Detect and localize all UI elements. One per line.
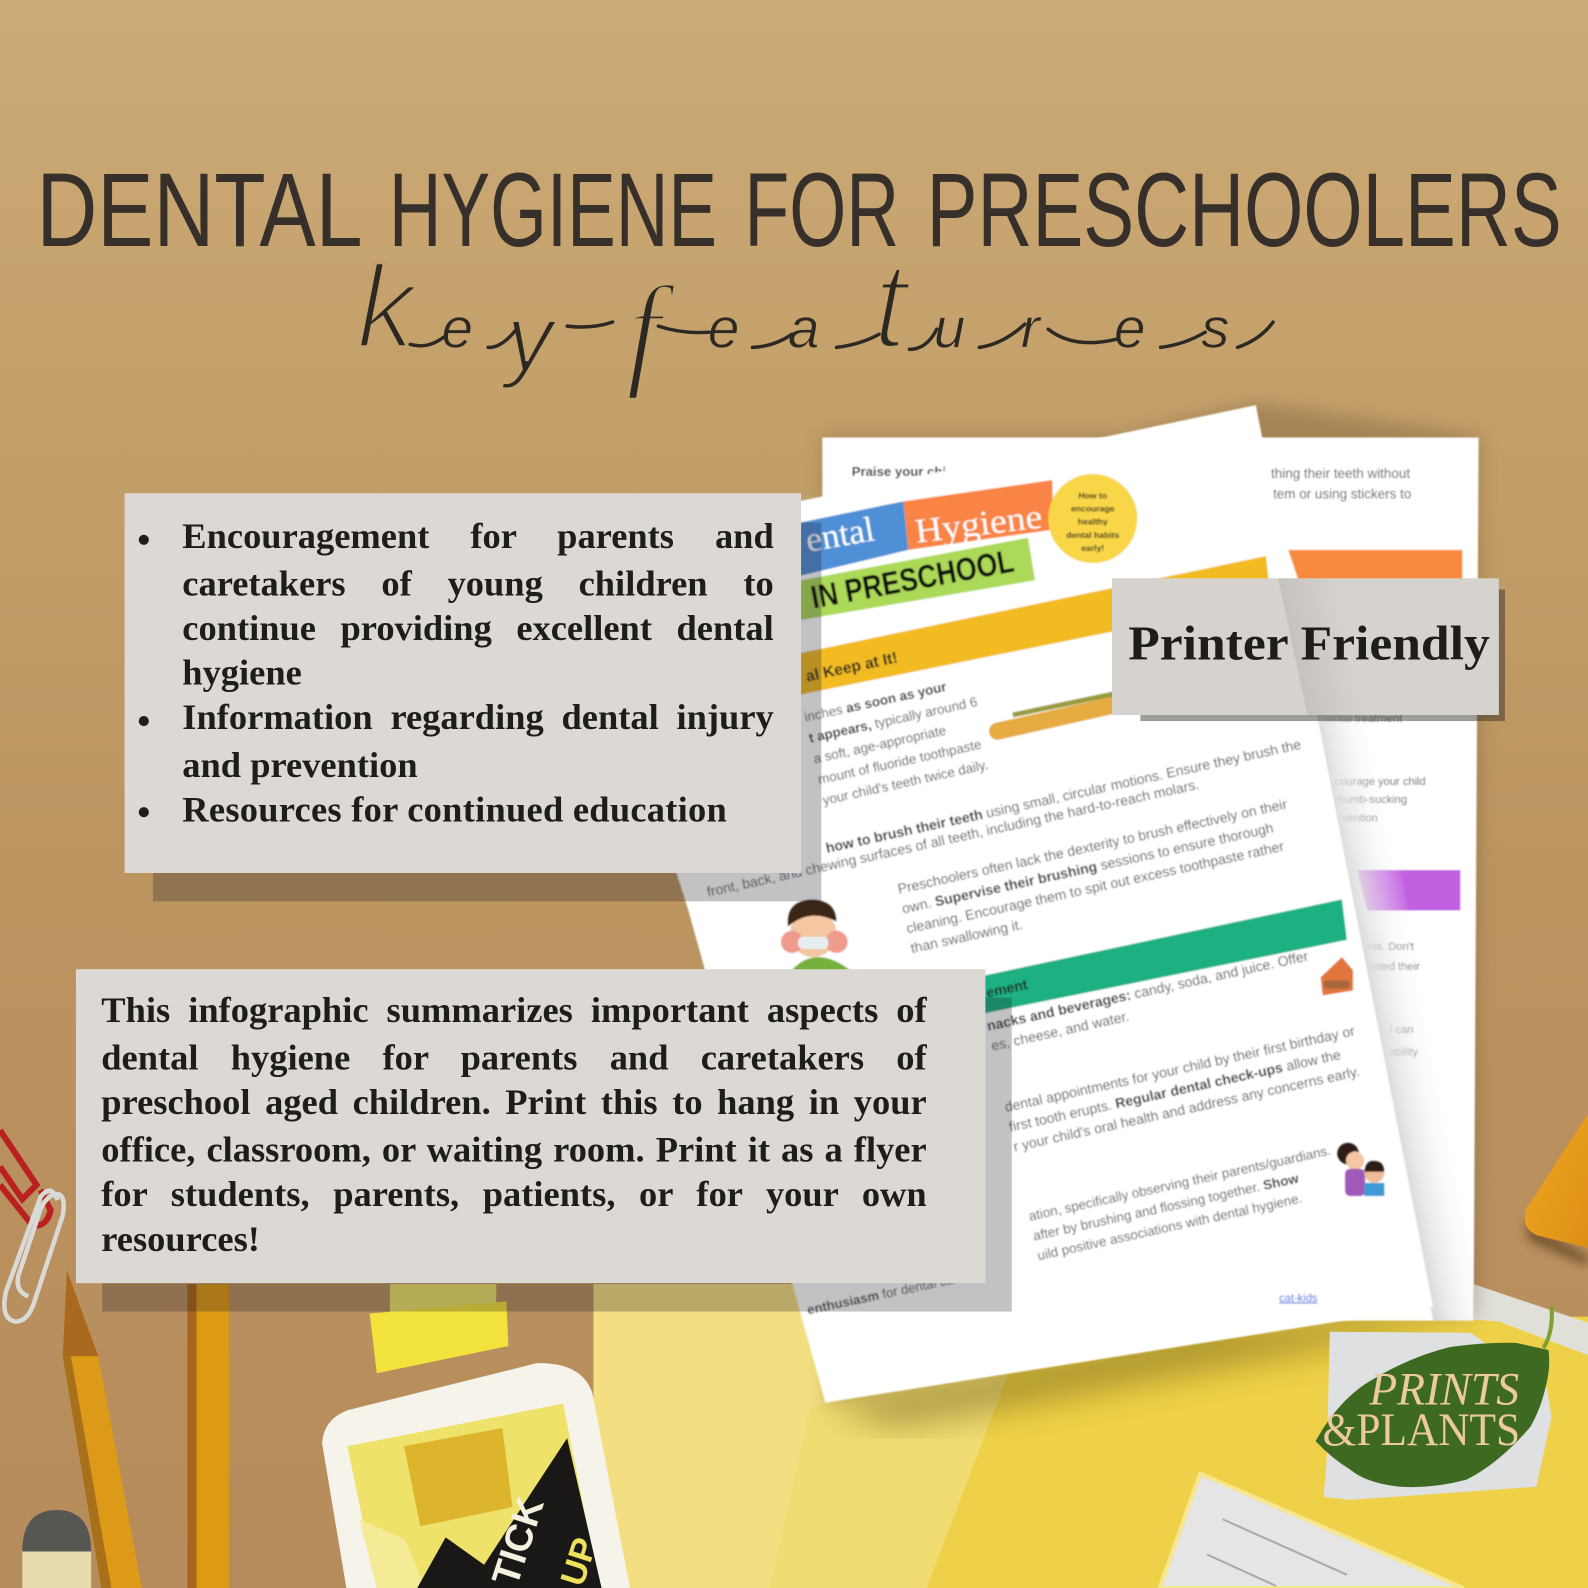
- icon: paper clips: [0, 1130, 64, 1322]
- document: front page: [573, 405, 1433, 1403]
- subtitle: key features: y: [500, 286, 558, 390]
- description text: resources!: [101, 1218, 260, 1259]
- page header: text: ental: [803, 508, 878, 560]
- panel: features: [125, 493, 801, 873]
- link: cat-kids: [1279, 1292, 1318, 1304]
- icon: pencil: [63, 1270, 142, 1588]
- yellow badge: How to: [1078, 490, 1107, 500]
- page header: blue: [790, 501, 908, 578]
- icon: child with braces: [781, 899, 853, 972]
- document: front page: own. Supervise their brushing sessions to ensure thorough: [900, 819, 1275, 917]
- yellow badge: healthy: [1078, 517, 1108, 527]
- panel shadow: description: [102, 998, 1012, 1312]
- subtitle: key features: s: [1201, 297, 1229, 360]
- bullet list: Resources for continued education: [182, 789, 727, 829]
- bullets: [139, 535, 149, 817]
- subtitle: key features: f: [626, 261, 676, 401]
- page header: text: [803, 498, 1044, 616]
- document text lower: after by brushing and flossing together. Show: [1032, 1170, 1300, 1244]
- description text: dental hygiene for parents and caretakers of: [101, 1037, 927, 1078]
- yellow section bar: al Keep at It!: [804, 649, 899, 685]
- document text lower: first tooth erupts. Regular dental check-ups allow the: [1007, 1046, 1342, 1135]
- document text: how to brush their teeth using small, circular motions. Ensure they brush the: [824, 736, 1303, 856]
- document: back page: courage your child: [1335, 776, 1426, 788]
- subtitle: key features: u: [934, 297, 965, 360]
- subtitle: key features: [356, 236, 1273, 401]
- bullet list: continue providing excellent dental: [182, 608, 774, 648]
- icon: glue stick: [322, 1284, 630, 1588]
- footnote: enthusiasm for dental care: [806, 1269, 966, 1317]
- icon: second pencil: [187, 1284, 229, 1588]
- page header: orange: [903, 480, 1053, 550]
- document: back page: [822, 438, 1479, 1321]
- document text lower: [985, 941, 1389, 1263]
- subtitle: key features: e: [708, 297, 739, 360]
- document text: front, back, and chewing surfaces of all teeth, including the hard-to-reach molars.: [705, 776, 1200, 900]
- page header: text: IN PRESCHOOL: [808, 543, 1017, 616]
- icon: eraser pencil: [22, 1510, 91, 1588]
- panel shadow: printer friendly: [1140, 589, 1505, 721]
- subtitle: key features: r: [1021, 297, 1042, 360]
- icon: glue stick: TICK: [484, 1492, 553, 1588]
- document: back page: nated their: [1367, 961, 1420, 973]
- document: back page: ability: [1390, 1046, 1418, 1058]
- yellow section bar: [790, 556, 1271, 697]
- page header: text: Hygiene: [913, 498, 1044, 551]
- document text: [673, 607, 1306, 900]
- panel shadow: features: [153, 523, 821, 901]
- bullet list: and prevention: [182, 744, 418, 785]
- bullet list: Encouragement for parents and: [182, 515, 774, 556]
- document: back page: ms. Don't: [1367, 941, 1415, 953]
- subtitle: key features: t: [873, 236, 912, 374]
- yellow badge: dental habits: [1066, 530, 1119, 540]
- page header: green: [790, 538, 1035, 622]
- document text: a soft, age-appropriate: [812, 723, 947, 766]
- panel: printer friendly: [1112, 578, 1499, 715]
- yellow badge: [1048, 474, 1137, 563]
- title: FOR: [744, 152, 899, 269]
- shadow of documents on folder: [825, 1321, 1477, 1428]
- panel: description: [76, 969, 985, 1283]
- document: back page: thumb-sucking: [1335, 794, 1407, 806]
- icon: snack: [1321, 957, 1353, 996]
- panel: printer friendly: Printer Friendly: [1128, 616, 1490, 670]
- shadow of documents: [822, 403, 1481, 1403]
- document text lower: nacks and beverages: candy, soda, and juice. Offer: [985, 948, 1310, 1034]
- yellow badge: encourage: [1071, 503, 1115, 513]
- document text lower: es, cheese, and water.: [990, 1008, 1131, 1054]
- bullet list: hygiene: [182, 652, 302, 693]
- title: HYGIENE: [389, 152, 717, 269]
- document: back page: I can: [1390, 1024, 1414, 1036]
- logo: prints & plants leaf: PRINTS: [1368, 1364, 1519, 1416]
- description text: This infographic summarizes important aspects of: [101, 989, 927, 1030]
- yellow badge: early!: [1081, 543, 1104, 553]
- document text: inches as soon as your: [803, 679, 949, 725]
- logo: prints & plants leaf: [1316, 1306, 1552, 1500]
- document: front page: than swallowing it.: [909, 916, 1024, 956]
- green section bar: ement: [985, 977, 1029, 1001]
- document text: your child's teeth twice daily.: [821, 757, 990, 808]
- document text: t appears, typically around 6: [807, 694, 979, 746]
- icon: toothbrush: [998, 693, 1119, 731]
- subtitle: key features: e: [442, 297, 473, 360]
- description text: for students, parents, patients, or for your own: [101, 1174, 927, 1214]
- title: DENTAL: [36, 152, 363, 269]
- description text: office, classroom, or waiting room. Print it as a flyer: [101, 1129, 927, 1170]
- title: [36, 152, 1562, 269]
- description text: preschool aged children. Print this to hang in your: [101, 1082, 927, 1122]
- logo: prints & plants leaf: &PLANTS: [1323, 1404, 1520, 1456]
- document: back page: vention: [1342, 812, 1378, 824]
- document: front page: Preschoolers often lack the dexterity to brush effectively on their: [896, 796, 1289, 897]
- description text: [76, 969, 985, 1283]
- yellow folder: [593, 1284, 1588, 1588]
- document: front page: cleaning. Encourage them to spit out excess toothpaste rather: [905, 838, 1286, 936]
- document text: mount of fluoride toothpaste: [817, 737, 983, 787]
- document text lower: r your child's oral health and address any concerns early.: [1012, 1063, 1361, 1155]
- bullet list: caretakers of young children to: [182, 563, 774, 604]
- bullet list: [125, 493, 801, 873]
- bullet list: Information regarding dental injury: [182, 697, 774, 737]
- document text lower: ation, specifically observing their parents/guardians.: [1027, 1143, 1332, 1224]
- subtitle: key features: e: [1114, 297, 1146, 360]
- subtitle: key features: k: [356, 241, 420, 372]
- document: back page: thing their teeth without: [1271, 466, 1410, 481]
- icon: index card: [1160, 1474, 1463, 1588]
- icon: parent and child: [1337, 1142, 1384, 1196]
- document: back page: tem or using stickers to: [1273, 486, 1411, 501]
- document text lower: uild positive associations with dental hygiene.: [1036, 1191, 1304, 1263]
- green section bar: [952, 899, 1347, 1018]
- subtitle: key features: a: [788, 297, 819, 360]
- document: back page: dental treatment: [1322, 713, 1403, 725]
- document text lower: dental appointments for your child by their first birthday or: [1003, 1022, 1357, 1115]
- icon: orange eraser: [1524, 1114, 1588, 1266]
- document: back page: Praise your chi: [852, 464, 946, 479]
